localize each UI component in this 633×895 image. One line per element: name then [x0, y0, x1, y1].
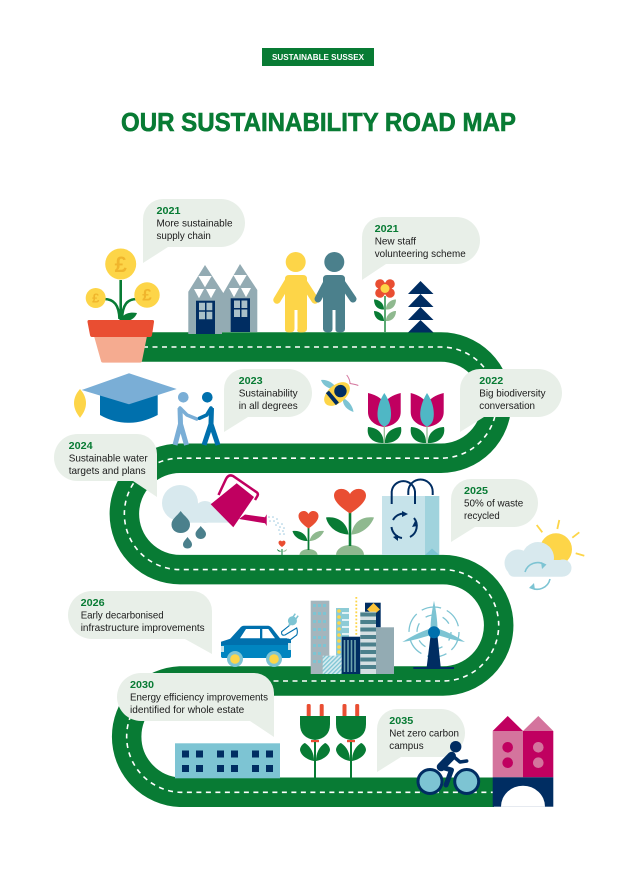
icon: cyclist — [418, 741, 479, 794]
callout: 2035 net zero: campus — [389, 741, 424, 752]
callout: 2022 biodiversity — [460, 369, 562, 432]
callout: 2035 net zero — [377, 709, 465, 772]
callout: 2025 waste: 50% of waste — [464, 498, 523, 510]
callout: 2026 infrastructure: Early decarbonised — [81, 610, 164, 622]
callout: 2026 infrastructure — [68, 591, 212, 654]
icon: city skyline — [311, 597, 394, 674]
callout: 2022 biodiversity: 2022 — [479, 375, 503, 387]
callout: 2025 waste: recycled — [464, 511, 500, 522]
callout: 2023 degrees: 2023 — [239, 375, 263, 387]
callout: 2030 energy efficiency — [117, 673, 274, 737]
callout: 2024 water: Sustainable water — [69, 454, 148, 464]
icon: electric car — [221, 612, 300, 667]
icon: money plant in pot: £ — [92, 290, 100, 306]
callout: 2025 waste: 2025 — [464, 485, 488, 497]
icon: low-rise building — [175, 743, 280, 778]
icon: growing heart flowers — [277, 489, 374, 555]
callout: 2021 supply chain: 2021 — [156, 205, 181, 217]
icon: tulips — [368, 393, 444, 443]
callout: 2035 net zero: Net zero carbon — [389, 728, 459, 740]
callout: 2026 infrastructure: 2026 — [81, 597, 105, 609]
callout: 2021 volunteering: volunteering scheme — [375, 249, 466, 260]
callout: 2021 volunteering: 2021 — [375, 223, 399, 235]
icon: pine tree — [408, 281, 434, 332]
title: OUR SUSTAINABILITY ROAD MAP — [121, 109, 516, 137]
callout: 2035 net zero: 2035 — [389, 715, 413, 727]
icon: watering can — [211, 475, 285, 535]
winding road — [124, 347, 499, 792]
callout: 2021 volunteering — [362, 217, 480, 280]
callout: 2024 water: targets and plans — [69, 466, 146, 477]
icon: rain cloud — [162, 485, 230, 548]
callout: 2025 waste — [451, 479, 538, 542]
icon: plug flowers — [300, 704, 366, 778]
callout: 2022 biodiversity: conversation — [479, 401, 535, 412]
icon: two people holding hands — [277, 252, 353, 332]
callout: 2022 biodiversity: Big biodiversity — [479, 388, 546, 400]
callout: 2021 supply chain: More sustainable — [156, 218, 233, 230]
callout: 2023 degrees: in all degrees — [239, 401, 298, 412]
icon: graduation cap — [74, 373, 177, 423]
callout: 2021 supply chain: supply chain — [156, 231, 211, 242]
callout: 2030 energy efficiency: identified for whole estate — [130, 705, 245, 716]
callout: 2024 water — [54, 434, 157, 497]
icon: red flower — [374, 279, 396, 332]
icon: sun behind cloud — [504, 520, 584, 590]
icon: shopping bag with recycling arrows — [382, 480, 439, 555]
callout: 2021 supply chain — [143, 199, 245, 263]
icon: wind turbine — [402, 601, 465, 669]
icon: money plant in pot: £ — [142, 286, 152, 304]
icon: bee — [320, 375, 358, 412]
header badge — [262, 48, 374, 66]
icon: money plant in pot — [86, 248, 160, 363]
callout: 2026 infrastructure: infrastructure improvements — [81, 623, 205, 634]
icon: handshake — [175, 392, 218, 445]
icon: money plant in pot: £ — [115, 252, 128, 277]
callout: 2023 degrees: Sustainability — [239, 388, 298, 400]
callout: 2030 energy efficiency: Energy efficiency improvements — [130, 692, 268, 704]
header badge: SUSTAINABLE SUSSEX — [272, 53, 365, 62]
callout: 2024 water: 2024 — [69, 440, 93, 452]
callout: 2021 volunteering: New staff — [375, 236, 416, 248]
icon: campus building — [493, 716, 553, 807]
callout: 2023 degrees — [224, 369, 312, 432]
icon: houses — [188, 264, 257, 334]
callout: 2030 energy efficiency: 2030 — [130, 679, 154, 691]
